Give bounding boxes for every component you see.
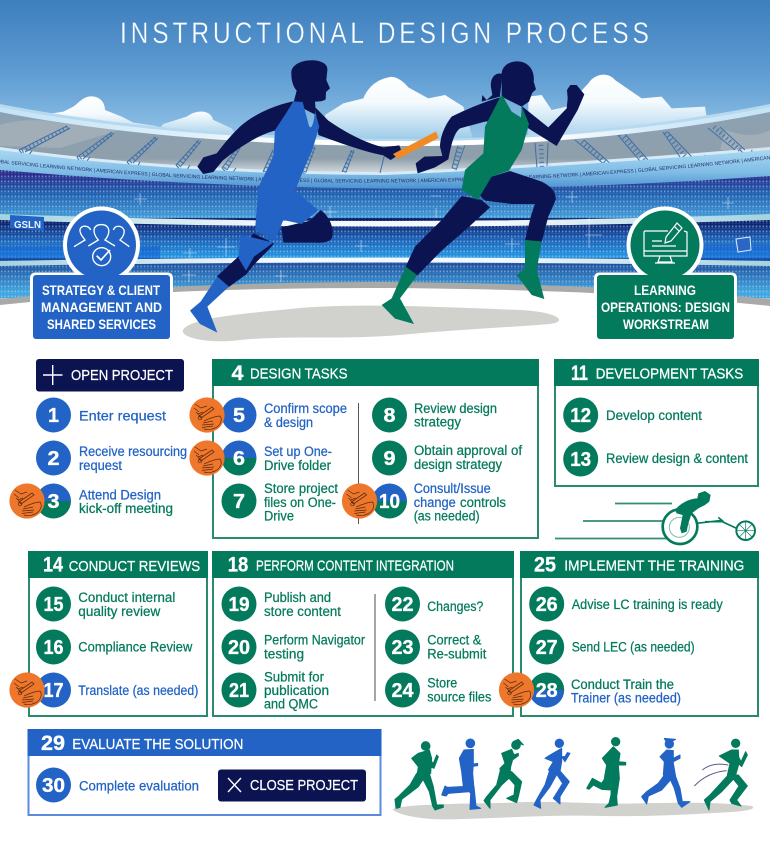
step 23 xyxy=(385,630,487,664)
header: implement the training: IMPLEMENT THE TRAINING xyxy=(564,558,744,574)
runners group xyxy=(392,737,753,819)
crowd stands xyxy=(0,165,770,300)
step 8: strategy xyxy=(414,414,461,430)
step 15: 15 xyxy=(44,594,64,616)
step 21: 21 xyxy=(229,680,249,702)
step 2: Receive resourcing xyxy=(79,444,187,459)
icon: baton handoff on step 5 xyxy=(189,397,225,433)
icon: baton handoff on step 3 xyxy=(9,483,45,519)
button: close project: CLOSE PROJECT xyxy=(250,777,358,794)
step 26: Advise LC training is ready xyxy=(572,597,723,612)
step 23: 23 xyxy=(392,637,414,659)
step 9: design strategy xyxy=(414,457,502,472)
runner 6 xyxy=(642,738,690,807)
step 17: Translate (as needed) xyxy=(78,683,198,698)
runner 4 xyxy=(534,739,570,808)
step 2: request xyxy=(79,458,122,473)
badge: strategy and client management xyxy=(30,206,173,340)
step 26: 26 xyxy=(536,594,558,616)
runner 5 xyxy=(587,737,626,807)
step 27: Send LEC (as needed) xyxy=(572,640,695,655)
badge label: MANAGEMENT AND xyxy=(41,299,162,315)
step 10: 10 xyxy=(379,491,400,513)
header: design tasks: 4 xyxy=(232,362,244,385)
step 12 xyxy=(563,398,702,432)
header: perform content integration: PERFORM CONTENT INTEGRATION xyxy=(256,558,454,574)
header: perform content integration: 18 xyxy=(228,554,248,576)
step 24 xyxy=(385,672,492,708)
GSLN flag: GSLN xyxy=(14,220,41,231)
step 30 xyxy=(36,768,199,802)
step 15: quality review xyxy=(78,604,161,619)
header: design tasks: DESIGN TASKS xyxy=(250,366,348,382)
step 13: Review design & content xyxy=(606,451,748,466)
panel: evaluate the solution xyxy=(28,729,382,815)
header: implement the training: 25 xyxy=(534,554,556,576)
step 15 xyxy=(36,586,175,622)
header: conduct reviews xyxy=(28,551,208,578)
stadium roof xyxy=(0,104,770,178)
step 16: 16 xyxy=(44,637,64,659)
step 5: Confirm scope xyxy=(264,401,347,416)
step 1 xyxy=(36,398,166,432)
runner 2 xyxy=(442,739,481,809)
step 19 xyxy=(222,586,341,622)
clouds xyxy=(42,75,707,143)
step 24: 24 xyxy=(392,680,414,702)
step 3: kick-off meeting xyxy=(79,501,173,516)
step 3: Attend Design xyxy=(79,488,161,502)
step 20: 20 xyxy=(228,637,250,659)
panel: conduct reviews xyxy=(28,551,208,716)
step 8 xyxy=(372,398,497,432)
step 1: Enter request xyxy=(79,408,166,424)
runner 3 xyxy=(484,739,523,808)
step 23: Re-submit xyxy=(427,646,487,661)
step 16 xyxy=(36,630,193,664)
panel: development tasks xyxy=(554,359,759,486)
step 12: 12 xyxy=(570,405,591,427)
badge: learning operations design workstream xyxy=(594,206,737,340)
step 26 xyxy=(529,586,723,622)
header: evaluate the solution xyxy=(28,729,382,756)
runner shadow xyxy=(183,306,559,341)
header: perform content integration xyxy=(212,551,514,578)
sparkles xyxy=(134,191,734,282)
button: open project xyxy=(36,359,184,392)
step 19: 19 xyxy=(228,594,250,616)
step 19: Publish and xyxy=(264,590,331,605)
male runner silhouette xyxy=(190,60,402,333)
panel: perform content integration xyxy=(212,551,514,716)
runner 1 xyxy=(395,742,443,810)
step 24: Store xyxy=(427,676,457,691)
step 13 xyxy=(563,442,748,476)
icon: people with check xyxy=(74,225,129,266)
step 9: 9 xyxy=(384,448,396,470)
title: INSTRUCTIONAL DESIGN PROCESS xyxy=(120,16,649,50)
badge label: WORKSTREAM xyxy=(623,316,709,332)
step 23: Correct & xyxy=(427,632,481,647)
step 8: Review design xyxy=(414,401,497,416)
step 10: (as needed) xyxy=(414,508,480,524)
step 22: Changes? xyxy=(427,599,483,614)
header: development tasks xyxy=(554,359,759,386)
header: evaluate the solution: 29 xyxy=(41,732,65,755)
header: implement the training xyxy=(520,551,759,578)
step 2 xyxy=(36,440,187,476)
step 21: Submit for xyxy=(264,670,324,685)
step 22: 22 xyxy=(392,594,414,616)
step 13: 13 xyxy=(570,449,591,471)
sponsor banner band xyxy=(0,150,770,189)
step 5: & design xyxy=(264,415,313,430)
step 27 xyxy=(529,630,695,664)
header: design tasks xyxy=(212,359,539,386)
panel: design tasks xyxy=(212,359,539,538)
step 28: Trainer (as needed) xyxy=(571,691,681,706)
step 17 xyxy=(36,672,198,708)
header: development tasks: 11 xyxy=(571,362,588,385)
step 15: Conduct internal xyxy=(78,590,175,605)
step 19: store content xyxy=(264,604,341,619)
step 21: publication xyxy=(264,683,329,698)
header: conduct reviews: CONDUCT REVIEWS xyxy=(69,558,200,575)
small flag xyxy=(736,237,751,252)
runner 7 xyxy=(704,739,747,810)
step 17: 17 xyxy=(44,680,64,702)
icon: baton handoff on step 17 xyxy=(9,672,45,708)
step 6: Drive folder xyxy=(264,458,331,473)
badge label: STRATEGY & CLIENT xyxy=(42,282,160,298)
badge label: LEARNING xyxy=(634,282,696,298)
step 7: Store project xyxy=(264,481,338,496)
step 20: Perform Navigator xyxy=(264,632,365,648)
step 5 xyxy=(222,398,347,432)
header: evaluate the solution: EVALUATE THE SOLUTION xyxy=(72,736,243,753)
speed lines behind wheelchair racer xyxy=(555,504,672,538)
step 22 xyxy=(385,586,483,622)
step 10: Consult/Issue xyxy=(414,481,491,496)
step 9 xyxy=(372,440,522,476)
female runner silhouette xyxy=(382,61,584,324)
badge label: SHARED SERVICES xyxy=(47,316,156,332)
step 7: 7 xyxy=(233,491,245,513)
motion swooshes xyxy=(694,764,728,786)
step 6 xyxy=(222,440,332,476)
step 20 xyxy=(222,630,365,664)
step 7: Drive xyxy=(264,508,294,524)
step 8: 8 xyxy=(384,405,396,427)
badge label: OPERATIONS: DESIGN xyxy=(601,299,730,315)
header: conduct reviews: 14 xyxy=(43,554,63,576)
step 3 xyxy=(36,484,173,518)
header: development tasks: DEVELOPMENT TASKS xyxy=(596,366,743,382)
step 10 xyxy=(372,481,506,524)
panel: implement the training xyxy=(520,551,759,716)
step 16: Compliance Review xyxy=(78,640,193,654)
step 12: Develop content xyxy=(606,408,702,423)
step 2: 2 xyxy=(48,448,60,470)
icon: baton handoff on step 6 xyxy=(189,440,225,476)
step 10: controls xyxy=(460,495,506,510)
step 30: Complete evaluation xyxy=(79,778,199,794)
step 1: 1 xyxy=(48,405,59,427)
step 24: source files xyxy=(427,690,492,705)
step 3: 3 xyxy=(48,491,60,513)
button: close project xyxy=(218,770,366,802)
step 10: change xyxy=(414,495,456,510)
step 21: and QMC xyxy=(264,697,318,712)
step 6: 6 xyxy=(233,448,245,470)
step 27: 27 xyxy=(536,637,558,659)
step 30: 30 xyxy=(42,775,65,797)
GSLN flag xyxy=(10,215,44,231)
badge label xyxy=(41,282,162,332)
step 9: Obtain approval of xyxy=(414,443,522,458)
step 28 xyxy=(529,672,681,708)
step 5: 5 xyxy=(233,405,245,427)
icon: baton handoff on step 10 xyxy=(342,483,377,519)
step 6: Set up One- xyxy=(264,444,332,459)
icon: monitor with pencil xyxy=(644,223,687,263)
track ground xyxy=(0,282,770,352)
step 7: files on One- xyxy=(264,495,336,510)
step 21 xyxy=(222,670,329,712)
step 20: testing xyxy=(264,646,304,662)
baton xyxy=(393,132,438,159)
icon: baton handoff on step 28 xyxy=(499,672,534,708)
step 28: 28 xyxy=(536,680,558,702)
step 28: Conduct Train the xyxy=(571,677,674,692)
background: stadium scene xyxy=(0,0,770,306)
icon: wheelchair racer xyxy=(663,491,755,544)
badge label xyxy=(601,282,730,332)
button: open project: OPEN PROJECT xyxy=(71,367,173,384)
step 7 xyxy=(222,481,338,524)
